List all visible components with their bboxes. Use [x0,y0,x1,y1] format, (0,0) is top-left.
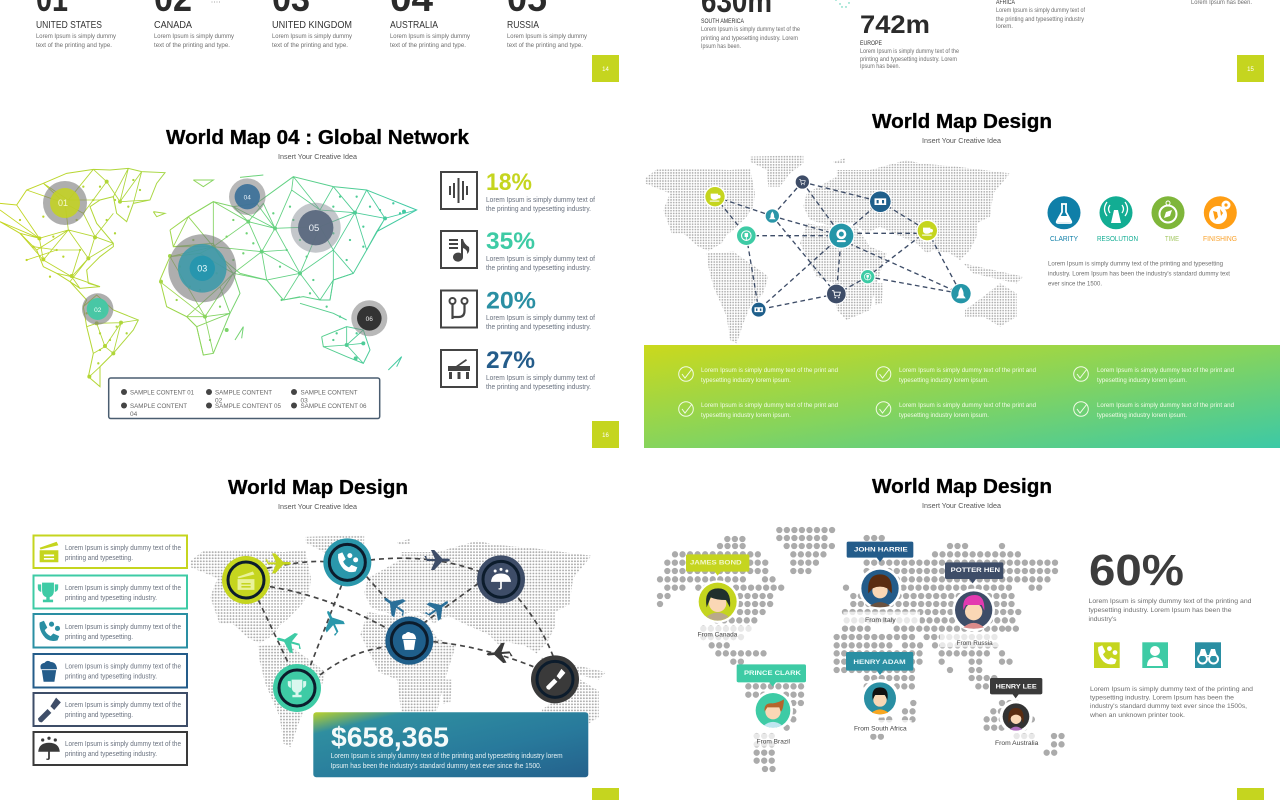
plane teal [319,607,348,639]
person prince clark: PRINCE CLARK [744,670,801,677]
node umbrella [477,555,525,603]
stat description: typesetting industry. Lorem Ipsum has been the [1088,607,1232,614]
title: World Map Design [228,476,408,499]
stat description: industry's [1088,616,1117,623]
legend box: SAMPLE CONTENT [300,390,358,396]
hub 01 [43,181,87,225]
country 05 russia: RUSSIA [507,20,539,31]
lower description: typesetting industry. Lorem Ipsum has been the [1090,694,1234,702]
node brush [531,655,579,703]
stat 35% [441,228,595,272]
person henry lee: HENRY LEE [996,684,1037,691]
person henry lee [990,678,1042,747]
teal dot remnants [836,0,849,7]
country 04 australia: AUSTRALIA [390,20,438,31]
page number 15 [1237,55,1264,82]
node plug [736,225,757,246]
item: popcorn: printing and typesetting industry. [65,674,157,680]
country 05 russia: text of the printing and type. [507,42,583,49]
country 01 united states: UNITED STATES [36,20,102,31]
page number 15: 15 [1247,67,1254,73]
hub 06: 06 [366,316,373,323]
gradient banner: Lorem Ipsum is simply dummy text of the print and [1097,367,1234,374]
item: clapper [34,536,187,568]
europe stat: 742m [860,11,930,39]
gradient banner: typesetting industry lorem ipsum. [1097,377,1187,384]
title: World Map Design [872,475,1052,498]
item: brush [34,693,187,726]
slide 15 fragment: continents [701,0,1264,82]
subtitle: Insert Your Creative Idea [278,504,357,511]
hub 03 [168,234,236,302]
stat 20% [441,288,595,331]
slide 14 fragment: five countries [36,0,619,82]
hub 03: 03 [197,264,207,274]
lower description [1089,686,1253,719]
check items [679,367,1088,416]
africa stat: AFRICA [996,0,1015,6]
africa stat [996,0,1085,30]
stat 18% [441,169,595,213]
country 03 united kingdom: Lorem Ipsum is simply dummy [272,33,353,40]
stat 27% [441,347,595,391]
hub 04: 04 [244,194,251,202]
item: clapper: printing and typesetting. [65,555,133,562]
dot remnants near canada [212,1,220,3]
person john harrie: JOHN HARRIE [854,547,908,554]
lower description: industry's standard dummy text ever since the 1500s, [1090,703,1247,710]
europe stat: Ipsum has been. [860,63,900,70]
item: clapper: Lorem Ipsum is simply dummy text of the [65,545,181,552]
country 03 united kingdom: text of the printing and type. [272,42,348,49]
stat 27%: the printing and typesetting industry. [486,384,591,391]
slide 17: world map design network [644,110,1280,448]
country 05 russia [507,0,588,49]
feature time: TIME [1165,236,1179,243]
stat 18%: 18% [486,169,532,196]
icon: music note [441,231,477,268]
south america stat: Lorem Ipsum is simply dummy text of the [701,26,800,33]
gradient banner: typesetting industry lorem ipsum. [1097,412,1187,419]
person james bond: JAMES BOND [690,560,742,567]
item: phone: Lorem Ipsum is simply dummy text of the [65,624,181,631]
page number 14 [592,55,619,82]
plane blue left [379,590,411,621]
europe stat: EUROPE [860,41,882,47]
hub 01: 01 [58,198,68,208]
node cart [826,284,847,304]
person prince clark [737,664,806,747]
hub 04 [229,178,266,215]
node film [869,190,892,213]
country 03 united kingdom [272,0,353,49]
price callout: Ipsum has been the industry's standard dummy text ever since the 1500. [331,763,542,770]
africa stat: lorem. [996,23,1013,30]
feature time [1152,196,1184,243]
south america stat [701,0,800,50]
plane green [274,629,304,655]
slide 19: people map [660,475,1264,800]
person john harrie: From Italy [865,618,896,624]
feature clarity [1048,196,1080,243]
stat 27%: Lorem Ipsum is simply dummy text of [486,375,595,382]
description: industry. Lorem Ipsum has been the industry's standard dummy text [1048,270,1230,278]
legend box: SAMPLE CONTENT 06 [300,403,367,410]
country 02 canada [154,0,235,49]
legend box: 04 [130,411,138,418]
page number tab [1237,788,1264,800]
icon: piano [441,350,477,387]
title: World Map 04 : Global Network [166,126,470,149]
country 03 united kingdom: UNITED KINGDOM [272,20,352,31]
wire world map [0,168,417,387]
plane blue right [421,593,454,625]
node rocket [950,283,972,304]
item: umbrella: Lorem Ipsum is simply dummy text of the [65,741,181,748]
person john harrie [843,542,920,624]
plane slate [424,550,450,570]
person james bond [686,554,753,640]
feature finishing [1203,196,1237,243]
stat 27%: 27% [486,347,535,374]
country 04 australia: Lorem Ipsum is simply dummy [390,33,471,40]
legend box: SAMPLE CONTENT [130,403,187,410]
title: World Map Design [872,110,1052,133]
stat 18%: the printing and typesetting industry. [486,206,591,213]
price callout [313,712,588,777]
feature clarity: CLARITY [1050,236,1078,243]
gradient banner: typesetting industry lorem ipsum. [701,412,791,419]
feature finishing: FINISHING [1203,236,1237,243]
gradient banner [644,345,1280,448]
hub 06 [351,300,387,336]
dot rows [660,530,1062,769]
country 01 united states: Lorem Ipsum is simply dummy [36,33,117,40]
node plug small [860,269,875,284]
south america stat: Ipsum has been. [701,43,741,50]
country 01 united states: text of the printing and type. [36,42,112,49]
item: brush: Lorem Ipsum is simply dummy text of the [65,702,181,709]
legend box: SAMPLE CONTENT [215,390,272,396]
gradient banner: typesetting industry lorem ipsum. [701,377,791,384]
hub 05: 05 [309,223,319,234]
price callout: Lorem Ipsum is simply dummy text of the printing and typesetting industry lorem [331,753,563,760]
item: umbrella [34,732,187,765]
country 02 canada: Lorem Ipsum is simply dummy [154,33,235,40]
item: popcorn [34,654,187,688]
plane lime [265,553,291,573]
description: ever since the 1500. [1048,280,1102,288]
node cup [704,186,726,208]
item: umbrella: printing and typesetting industry. [65,751,157,758]
dotted world map with network [645,155,1023,343]
plane charcoal [486,642,513,664]
item: trophy: printing and typesetting industry. [65,595,157,602]
page number 14: 14 [602,67,609,73]
africa stat: Lorem Ipsum is simply dummy text of [996,7,1085,14]
page number 16 [592,421,619,448]
gradient banner: Lorem Ipsum is simply dummy text of the print and [899,402,1036,409]
list of features [34,536,187,765]
network links [715,182,961,310]
page number 16: 16 [602,433,609,439]
country 02 canada: CANADA [154,20,192,31]
gradient banner: Lorem Ipsum is simply dummy text of the print and [1097,402,1234,409]
legend box: 03 [300,398,308,404]
stat description [1088,598,1252,623]
country 04 australia: text of the printing and type. [390,42,466,49]
person prince clark: From Brazil [757,739,790,745]
person potter hen: From Russia [957,641,993,647]
item: phone: printing and typesetting. [65,634,133,641]
description: Lorem Ipsum is simply dummy text of the printing and typesetting [1048,260,1223,268]
subtitle: Insert Your Creative Idea [922,138,1001,145]
subtitle: Insert Your Creative Idea [278,154,357,161]
slide 18: flights map [34,476,619,800]
south america stat: SOUTH AMERICA [701,19,744,25]
feature resolution [1097,196,1138,243]
node rocket small [765,208,780,224]
node webcam [828,222,855,249]
stat 35%: the printing and typesetting industry. [486,265,591,272]
stat 20%: 20% [486,288,536,314]
item: trophy [34,576,187,608]
icon: phone square [1094,642,1120,668]
person potter hen: POTTER HEN [951,567,1000,574]
node cup right [916,220,938,242]
60% stat: 60% [1089,546,1184,595]
page number tab [592,788,619,800]
lower description: Lorem Ipsum is simply dummy text of the printing and [1090,686,1253,693]
hub 02: 02 [94,307,102,314]
flight routes and nodes [222,538,579,712]
country 05 russia: Lorem Ipsum is simply dummy [507,33,588,40]
subtitle: Insert Your Creative Idea [922,503,1001,510]
dashed routes [258,558,553,675]
stat 20%: the printing and typesetting industry. [486,324,591,331]
stat description: Lorem Ipsum is simply dummy text of the printing and [1088,598,1252,605]
price callout: $658,365 [331,722,449,752]
gradient banner: Lorem Ipsum is simply dummy text of the print and [899,367,1036,374]
country 04 australia [390,0,471,49]
africa stat: the printing and typesetting industry [996,16,1085,23]
person henry adam: HENRY ADAM [853,659,906,666]
country 02 canada: text of the printing and type. [154,42,230,49]
person james bond: From Canada [698,632,738,638]
large dot map with people [660,530,1062,769]
stat 35%: Lorem Ipsum is simply dummy text of [486,256,595,263]
europe stat [860,11,959,70]
legend box [109,378,380,418]
person henry adam [846,652,913,734]
item: brush: printing and typesetting. [65,712,133,719]
icon: person square [1142,642,1168,668]
stat 20%: Lorem Ipsum is simply dummy text of [486,315,595,322]
node trophy [273,664,321,712]
icon: binoculars square [1195,642,1221,668]
legend box: 02 [215,398,223,404]
stat 18%: Lorem Ipsum is simply dummy text of [486,197,595,204]
icon: cable [441,290,477,328]
item: trophy: Lorem Ipsum is simply dummy text of the [65,585,181,592]
icon: sound wave [441,172,477,209]
gradient banner: typesetting industry lorem ipsum. [899,377,989,384]
description [1048,260,1230,288]
dotted world map [190,535,606,747]
node phone [323,538,371,586]
europe stat: Lorem Ipsum is simply dummy text of the [860,48,959,55]
legend box: SAMPLE CONTENT 01 [130,390,194,396]
slide 16: global network [0,126,619,448]
lower description: when an unknown printer took. [1089,712,1185,719]
hub 05 [291,203,341,253]
gradient banner: Lorem Ipsum is simply dummy text of the print and [701,402,838,409]
node popcorn [385,617,433,665]
europe stat: printing and typesetting industry. Lorem [860,56,957,63]
item: popcorn: Lorem Ipsum is simply dummy text of the [65,664,181,670]
person henry lee: From Australia [995,741,1039,747]
item: phone [34,614,187,648]
node film small [751,302,767,318]
node cart small [795,174,810,190]
legend box: SAMPLE CONTENT 05 [215,403,281,410]
feature resolution: RESOLUTION [1097,236,1138,243]
gradient banner: typesetting industry lorem ipsum. [899,412,989,419]
stat 35%: 35% [486,228,535,255]
person henry adam: From South Africa [854,727,907,733]
hub 02 [82,293,113,325]
south america stat: printing and typesetting industry. Lorem [701,35,798,42]
node clapper [222,556,270,604]
country 01 united states [36,0,117,49]
person potter hen [940,562,1003,647]
gradient banner: Lorem Ipsum is simply dummy text of the print and [701,367,838,374]
